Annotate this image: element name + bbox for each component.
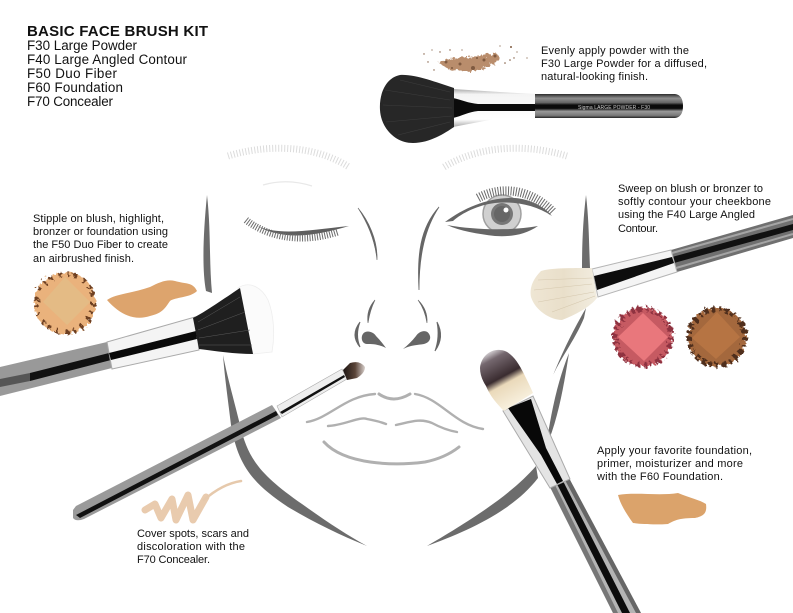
text: F50 instructions: Stipple on blush, highlight, — [33, 213, 164, 225]
powder swatch — [423, 45, 528, 72]
swatch: F50 powder — [34, 272, 96, 334]
text: F60 instructions: Apply your favorite foundation, — [597, 445, 752, 457]
text: F40 instructions: softly contour your cheekbone — [618, 196, 771, 208]
closed eye crease — [263, 182, 312, 186]
text: F50 instructions — [33, 213, 168, 265]
text: F50 instructions: an airbrushed finish. — [33, 253, 134, 265]
text: F60 instructions — [596, 445, 752, 483]
brush: F70 Concealer — [73, 362, 365, 520]
closed eye — [246, 220, 349, 238]
swatch: concealer — [145, 481, 241, 520]
brush: F30 Large Powder — [380, 75, 683, 143]
right cheek lines — [546, 308, 586, 447]
left nose bridge — [358, 208, 377, 260]
swatch: blush — [614, 308, 672, 366]
swatch: F60 foundation — [618, 493, 706, 524]
right eyebrow — [444, 148, 567, 167]
right nose bridge — [418, 207, 439, 290]
text: F70 instructions — [137, 528, 249, 566]
brush: F30 Large Powder: Sigma LARGE POWDER - F30 — [578, 105, 650, 111]
text: F50 instructions: the F50 Duo Fiber to create — [33, 239, 168, 251]
brush list: F40 Large Angled Contour — [27, 52, 188, 67]
text: F70 instructions: Cover spots, scars and — [137, 528, 249, 540]
text: F30 instructions: Evenly apply powder with the — [541, 45, 689, 57]
brush: F50 Duo Fiber — [0, 285, 274, 396]
text: F30 instructions — [541, 45, 707, 83]
left eyebrow — [228, 148, 349, 167]
brush list: F30 Large Powder — [27, 38, 138, 53]
brush: F40 Large Angled Contour — [531, 215, 793, 320]
brush list: F60 Foundation — [27, 80, 123, 95]
swatch: bronzer — [688, 308, 746, 366]
text: F40 instructions: Contour. — [618, 223, 658, 235]
title: BASIC FACE BRUSH KIT — [27, 23, 208, 40]
swatch: F50 cream — [107, 280, 197, 318]
text: F40 instructions: using the F40 Large Angled — [618, 209, 755, 221]
text: F70 instructions: discoloration with the — [137, 541, 245, 553]
brush list: F50 Duo Fiber — [27, 66, 118, 81]
text: F50 instructions: bronzer or foundation using — [33, 226, 168, 238]
text: F30 instructions: F30 Large Powder for a diffused, — [541, 58, 707, 70]
left temple line — [203, 195, 212, 293]
brush list: F70 Concealer — [27, 94, 114, 109]
face chart — [203, 148, 590, 546]
text: F40 instructions: Sweep on blush or bronzer to — [618, 183, 763, 195]
text: F30 instructions: natural-looking finish. — [541, 71, 648, 83]
text: F60 instructions: with the F60 Foundation. — [596, 471, 723, 483]
brush: F60 Foundation — [480, 350, 641, 613]
right temple line — [582, 195, 590, 268]
nose — [355, 300, 441, 351]
brush list — [27, 38, 188, 109]
text: F60 instructions: primer, moisturizer and more — [597, 458, 743, 470]
open eye — [445, 191, 553, 236]
text: F40 instructions — [618, 183, 771, 235]
left jaw line — [223, 355, 367, 546]
right jaw line — [427, 466, 538, 546]
lips — [307, 394, 483, 464]
text: F70 instructions: F70 Concealer. — [137, 554, 210, 566]
